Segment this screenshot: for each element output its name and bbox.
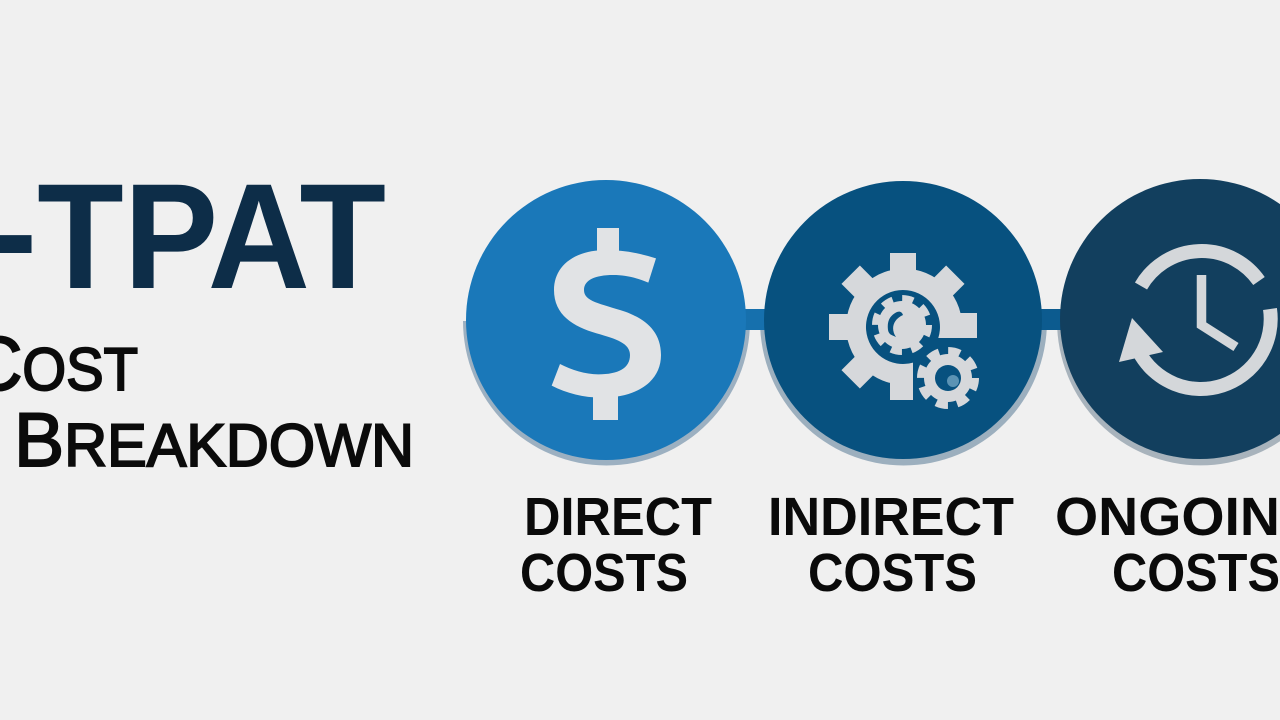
icon: gears xyxy=(829,253,977,405)
icon: clock with circular arrow xyxy=(1119,251,1271,389)
title: C-TPAT: TPAT xyxy=(37,152,386,320)
circle edge shadows xyxy=(463,321,1280,466)
label: direct costs xyxy=(520,487,712,603)
subtitle: Breakdown: BREAKDOWN xyxy=(14,398,414,483)
label: indirect costs: COSTS xyxy=(808,543,977,603)
label: indirect costs: INDIRECT xyxy=(768,487,1014,547)
panel: direct costs circle xyxy=(466,180,746,460)
panel: indirect costs circle xyxy=(764,181,1042,459)
label: ongoing costs: ONGOIN xyxy=(1055,487,1280,547)
label: direct costs: DIRECT xyxy=(524,487,712,547)
panel: ongoing costs circle xyxy=(1060,179,1280,459)
label: ongoing costs xyxy=(1055,487,1280,603)
label: indirect costs xyxy=(768,487,1014,603)
connector: direct to indirect xyxy=(735,309,780,330)
icon: dollar sign xyxy=(552,228,661,420)
connector: indirect to ongoing xyxy=(1030,309,1070,330)
label: direct costs: COSTS xyxy=(520,543,688,603)
